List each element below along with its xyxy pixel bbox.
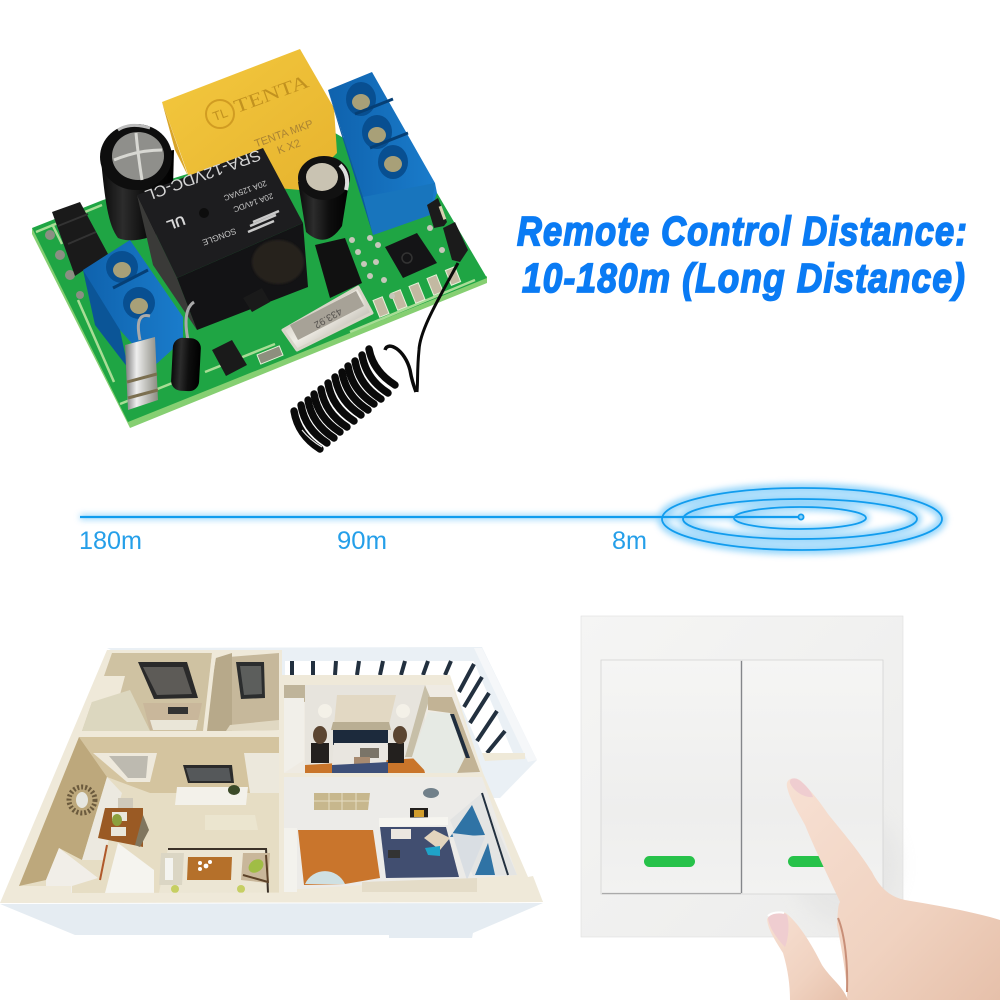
sunburst mirror: [69, 787, 95, 813]
label 8m: 8m: [612, 527, 647, 555]
blue terminal block left: [83, 240, 183, 368]
yellow capacitor: TENTA MKP: [253, 118, 315, 150]
outer pale walls: [0, 903, 543, 938]
yellow capacitor: TENTA: [231, 71, 312, 118]
illustration: 3D apartment floor plan: [0, 647, 543, 938]
distance diagram: glowing line and signal rings: [79, 488, 942, 555]
centre dividing wall tops: [0, 653, 543, 903]
heading: remote control distance: [517, 208, 968, 301]
dining table: [98, 798, 149, 847]
black electrolytic capacitor left: [100, 124, 174, 240]
sofa and rug: [159, 848, 270, 893]
crystal oscillator: [283, 287, 372, 350]
wall plate: [581, 616, 903, 937]
hand pressing switch: [767, 778, 1000, 1000]
signal line and rings: [80, 488, 942, 550]
label 90m: 90m: [337, 527, 387, 555]
balcony frame: [107, 647, 537, 798]
left green indicator: [644, 856, 695, 867]
left switch key: [601, 660, 741, 894]
round rug: [305, 871, 345, 884]
yellow capacitor: [162, 49, 337, 190]
bedroom two: [284, 777, 517, 892]
black relay SRA-12VDC-CL: 20A 125VAC: [222, 179, 268, 203]
black relay SRA-12VDC-CL: 20A 14VDC: [232, 191, 274, 214]
finger nail: [790, 778, 813, 797]
cream wall tops: [0, 650, 543, 903]
living room: [19, 737, 279, 893]
soft shadow under hand: [790, 805, 900, 925]
black relay SRA-12VDC-CL: [137, 146, 308, 330]
black connector on left: [52, 202, 108, 276]
blue terminal block right: [328, 72, 437, 235]
thumb nail: [768, 913, 788, 947]
yellow capacitor: K X2: [276, 137, 302, 157]
black relay SRA-12VDC-CL: SONGLE: [201, 226, 238, 248]
bedroom one: [284, 685, 480, 773]
diode: [171, 302, 201, 392]
bathroom: [204, 653, 279, 731]
open door: [105, 843, 154, 893]
fuse: [125, 316, 158, 410]
black heatsink part and IC chip: [315, 198, 468, 298]
kitchen: [82, 653, 212, 731]
yellow capacitor: TL: [210, 105, 230, 124]
black electrolytic capacitor right: [298, 156, 350, 240]
right green indicator: [788, 856, 838, 867]
right switch key: [742, 660, 883, 894]
black relay SRA-12VDC-CL: UL: [164, 212, 188, 234]
black relay SRA-12VDC-CL: SRA-12VDC-CL: [142, 146, 263, 204]
label 180m: 180m: [79, 527, 142, 555]
crystal oscillator: 433.92: [311, 305, 344, 330]
small black transistors: [212, 288, 270, 376]
photo: double wall switch with hand: [581, 616, 1000, 1000]
glow: [80, 488, 942, 550]
photo: receiver circuit board: [32, 49, 487, 449]
spring antenna coil: [294, 263, 458, 449]
PCB green board: [32, 130, 487, 428]
